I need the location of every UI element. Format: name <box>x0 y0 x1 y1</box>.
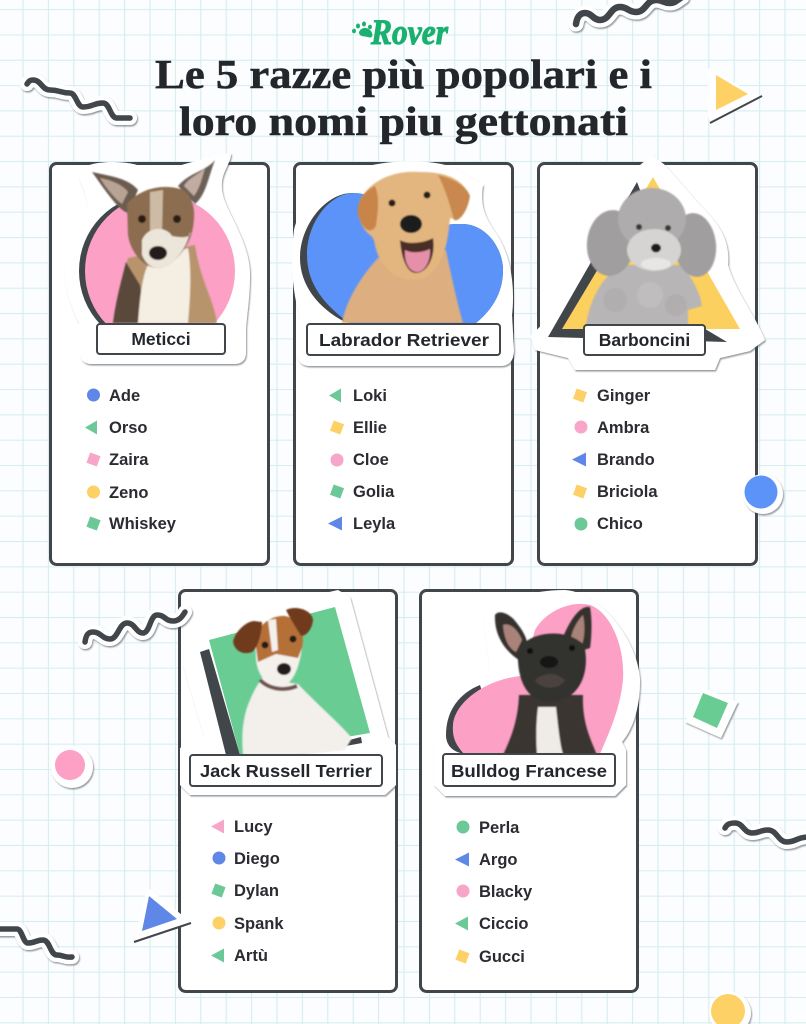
list: names: Perla <box>479 819 520 837</box>
label: Meticci: Meticci <box>131 329 191 349</box>
list: names <box>455 819 533 966</box>
label: Meticci <box>97 324 225 354</box>
label: Bulldog Francese: Bulldog Francese <box>451 761 607 781</box>
squiggle: top right <box>576 0 682 24</box>
triangle decoration: yellow <box>708 68 762 123</box>
squiggle: top left <box>27 80 130 118</box>
label: Labrador Retriever <box>307 324 500 355</box>
list: names: Orso <box>109 419 148 437</box>
list: names: Cloe <box>353 451 389 469</box>
list: names: Argo <box>479 851 518 869</box>
list: names: Ginger <box>597 387 651 405</box>
squiggle: middle right <box>725 823 806 842</box>
list: names <box>328 387 396 533</box>
list: names: Gucci <box>479 948 525 966</box>
squiggle: bottom left <box>0 929 72 957</box>
shape: pink circle <box>70 195 245 354</box>
list: names: Zeno <box>109 484 148 502</box>
panel: Meticci <box>50 153 268 564</box>
panel: Bulldog Francese <box>420 590 640 992</box>
circle decoration: blue <box>743 474 783 514</box>
list: names: Artù <box>234 947 268 965</box>
list: names <box>85 387 177 533</box>
list: names: Ade <box>109 387 140 405</box>
list: names: Briciola <box>597 483 658 501</box>
photo: french bulldog <box>495 607 597 755</box>
label: Labrador Retriever: Labrador Retriever <box>319 330 489 350</box>
triangle decoration: blue <box>134 887 191 942</box>
label: Bulldog Francese <box>443 754 615 786</box>
shape: blue heart <box>300 193 503 324</box>
squiggle: middle left <box>85 612 185 642</box>
list: names: Loki <box>353 387 387 405</box>
list: names: Ellie <box>353 419 387 437</box>
logo: Rover: Rover <box>370 12 449 52</box>
list: names: Ciccio <box>479 915 529 933</box>
label: Barboncini: Barboncini <box>599 330 690 350</box>
sticker outline <box>65 153 250 364</box>
photo: poodle <box>584 188 719 325</box>
shape: yellow triangle <box>548 177 740 342</box>
list: names: Leyla <box>353 515 396 533</box>
list: names: Zaira <box>109 451 149 469</box>
photo: jack russell <box>233 608 352 755</box>
list: names: Lucy <box>234 818 273 836</box>
photo: mixed breed dog <box>92 160 217 323</box>
circle decoration: yellow <box>709 992 751 1024</box>
photo: labrador <box>342 172 470 323</box>
label: Barboncini <box>584 325 705 355</box>
title: loro nomi piu gettonati <box>179 98 628 144</box>
list: names: Brando <box>597 451 655 469</box>
label: Jack Russell Terrier: Jack Russell Terrier <box>200 761 372 781</box>
list: names <box>211 818 284 965</box>
panel: Labrador Retriever <box>292 161 514 564</box>
sticker outline <box>180 590 396 795</box>
list: names: Diego <box>234 850 280 868</box>
title: Le 5 razze più popolari e i <box>155 51 652 97</box>
sticker outline <box>530 155 765 370</box>
square decoration: green <box>685 688 738 738</box>
shape: green square <box>200 607 370 755</box>
icon: paw <box>352 22 372 37</box>
list: names <box>572 387 658 533</box>
label: Jack Russell Terrier <box>190 755 382 786</box>
sticker outline <box>434 590 640 796</box>
list: names: Spank <box>234 915 284 933</box>
list: names: Dylan <box>234 882 279 900</box>
list: names: Whiskey <box>109 515 177 533</box>
panel: Jack Russell Terrier <box>180 590 396 992</box>
title <box>155 51 652 144</box>
sticker outline <box>292 161 514 366</box>
panel: Barboncini <box>530 155 765 564</box>
shape: pink blob <box>446 604 623 754</box>
list: names: Ambra <box>597 419 650 437</box>
list: names: Blacky <box>479 883 533 901</box>
list: names: Chico <box>597 515 643 533</box>
list: names: Golia <box>353 483 395 501</box>
circle decoration: pink <box>51 746 93 788</box>
